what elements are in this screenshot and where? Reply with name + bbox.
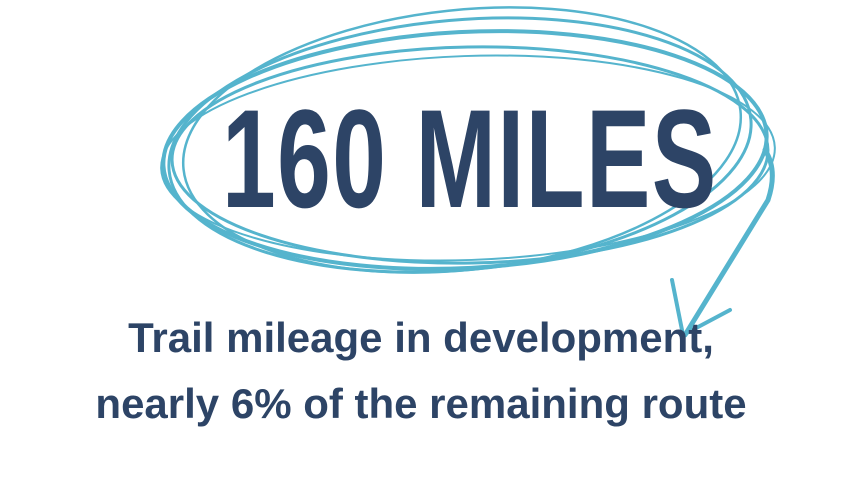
subtitle line 2: nearly 6% of the remaining route (95, 380, 747, 427)
arrow (672, 150, 772, 335)
title: 160 MILES: 160 MILES (222, 80, 718, 237)
subtitle line 1: Trail mileage in development, (128, 314, 714, 361)
